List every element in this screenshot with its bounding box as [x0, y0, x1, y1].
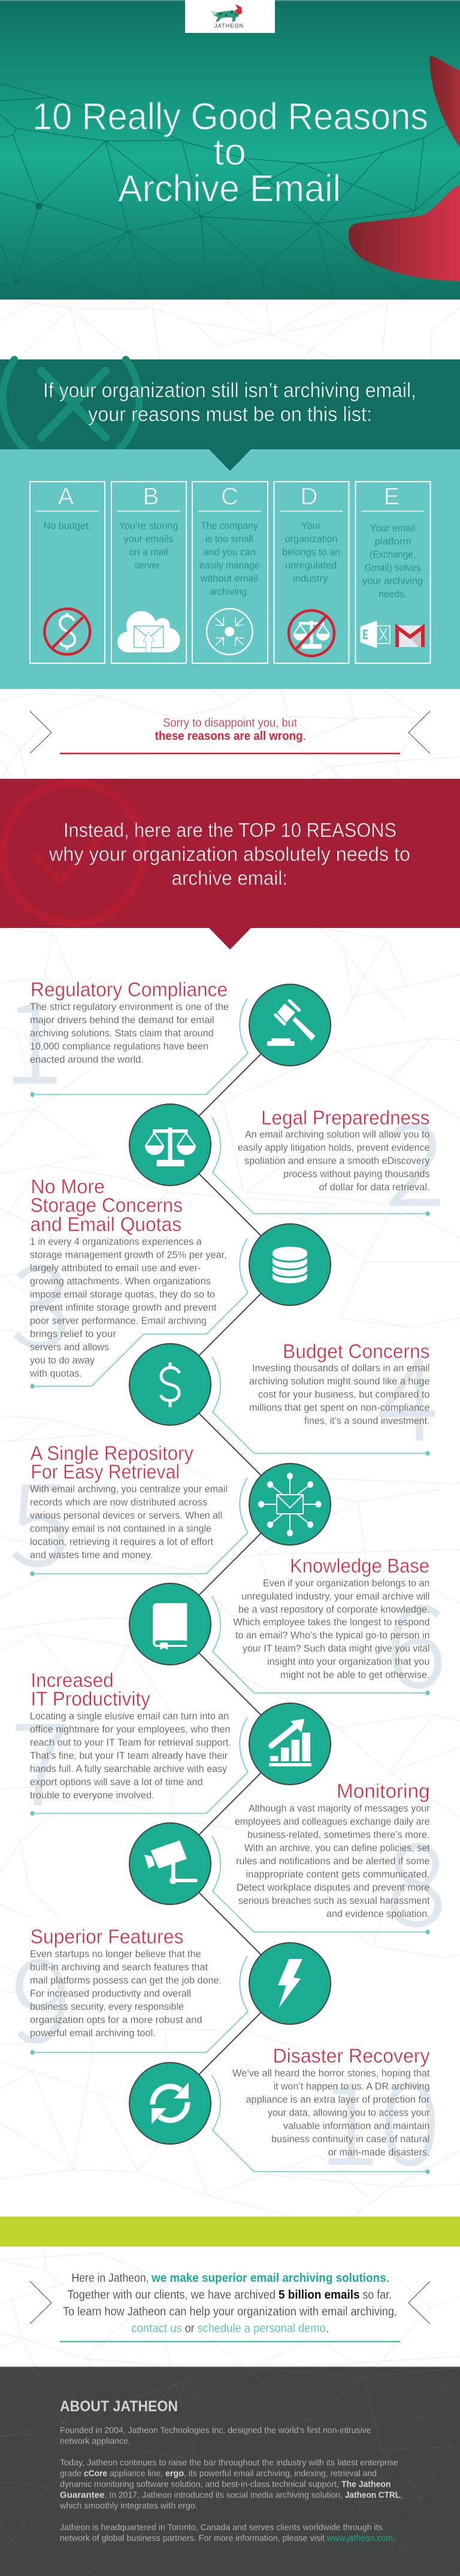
reason 10: it won’t happen to us. A DR archiving [273, 2081, 430, 2092]
callout: reasons are wrong [30, 711, 430, 754]
reason 9 [30, 1925, 331, 2055]
big numeral watermarks: 5 [10, 1434, 71, 1598]
hero network mesh [0, 84, 460, 299]
reason 10: or man-made disasters. [328, 2146, 430, 2158]
reason 9: business security, every responsible [30, 2001, 184, 2012]
reason 10: your data, allowing you to access your [268, 2107, 430, 2118]
reason 10: We’ve all heard the horror stories, hoping that [232, 2067, 430, 2079]
reason 2: of dollar for data retrieval. [319, 1181, 430, 1193]
card C: C [221, 483, 238, 510]
about heading: ABOUT JATHEON [60, 2398, 178, 2415]
about text: grade [60, 2469, 81, 2479]
about text: Founded in 2004, Jatheon Technologies Inc. designed the world’s first non-intrusive [60, 2426, 371, 2436]
reason 9: built-in archiving and search features that [30, 1961, 208, 1973]
reason 5: various personal devices or servers. When all [30, 1510, 222, 1521]
reason 3: No More [31, 1175, 105, 1198]
icon: compress arrows [207, 609, 253, 655]
card E: Gmail) solves [365, 562, 421, 573]
reason 9: Superior Features [30, 1925, 183, 1948]
reason 10: appliance is an extra layer of protection for [246, 2094, 430, 2105]
card E [356, 482, 430, 663]
reason 1: The strict regulatory environment is one of the [30, 1001, 229, 1012]
accent bracket [212, 1836, 428, 1932]
card C: is too small [205, 533, 253, 545]
card E: (Exchange, [370, 549, 416, 560]
about text [59, 2426, 402, 2544]
reason 8: business-related, sometimes there’s more. [247, 1829, 430, 1840]
about text: www.jatheon.com [326, 2533, 393, 2544]
call to action: we make superior email archiving solutions [151, 2272, 386, 2285]
reason 6: your IT team? Such data might give you vital [243, 1643, 430, 1654]
card D: belongs to an [282, 546, 340, 558]
call to action: contact us [131, 2322, 182, 2335]
reason 8: Detect workplace disputes and prevent more [237, 1882, 430, 1893]
about text: , [400, 2490, 402, 2501]
title: to [213, 131, 246, 173]
reason 8: inappropriate content gets communicated. [246, 1868, 430, 1880]
reason 1: archiving solutions. Stats claim that around [30, 1027, 214, 1039]
reason 5: company email is not contained in a single [30, 1523, 211, 1534]
reason 3: brings relief to your [30, 1328, 116, 1340]
call to action: To learn how Jatheon can help your organization with email archiving, [63, 2305, 397, 2318]
icon: growth chart [249, 1703, 331, 1785]
green divider band [0, 2217, 460, 2247]
title: Archive Email [118, 168, 341, 210]
reason 8: rules and notifications and be alerted if some [236, 1855, 430, 1867]
about text: network of global business partners. For more information, please visit [60, 2533, 325, 2544]
reason 7: IT Productivity [31, 1688, 150, 1710]
reason 7: office nightmare for your employees, who then [30, 1724, 230, 1735]
reason 6: Knowledge Base [290, 1555, 429, 1577]
icon: no scales [289, 610, 334, 656]
chevrons [30, 711, 430, 754]
section heading: archive email: [171, 867, 288, 889]
big numeral watermarks: 8 [386, 1794, 447, 1958]
about text: appliance line, [110, 2469, 163, 2479]
reason 10: Disaster Recovery [273, 2045, 430, 2067]
reason 6: might not be able to get otherwise. [280, 1669, 430, 1680]
reason 3: storage management growth of 25% per year, [30, 1249, 227, 1260]
card A: No budget. [43, 520, 91, 531]
call to action: Here in Jatheon, [72, 2272, 149, 2285]
reason 3: poor server performance. Email archiving [30, 1315, 207, 1326]
reason 2 [129, 1104, 430, 1216]
card B: You’re storing [119, 520, 178, 531]
about text: . In 2017, Jatheon introduced its social media archiving solution, [104, 2490, 343, 2501]
logo box [185, 0, 275, 33]
icon: Exchange logo [361, 621, 390, 648]
call to action: or [185, 2322, 195, 2335]
big numeral watermarks: 6 [386, 1555, 447, 1720]
reason 6 [129, 1555, 430, 1695]
reason 7: reach out to your IT Team for retrieval support. [30, 1737, 231, 1748]
reason 8: serious breaches such as sexual harassment [238, 1895, 430, 1906]
reason 8: employees and colleagues exchange daily are [235, 1816, 430, 1827]
icon: book [129, 1583, 211, 1665]
reason 8: Monitoring [337, 1780, 430, 1802]
card B: B [143, 483, 159, 510]
reason 4: fines, it’s a sound investment. [304, 1415, 430, 1426]
mesh nodes [13, 203, 42, 285]
reason 10: valuable information and maintain [283, 2120, 430, 2131]
reason 4: archiving solution might sound like a huge [249, 1375, 430, 1387]
reason 3 [29, 1175, 331, 1389]
icon: refresh [129, 2063, 211, 2144]
reason 4 [129, 1340, 430, 1456]
reason 10 [129, 2045, 430, 2174]
icon: Gmail logo [395, 625, 425, 647]
section heading [49, 819, 410, 889]
big numeral watermarks: 4 [377, 1308, 438, 1473]
section heading: your reasons must be on this list: [88, 403, 372, 426]
reason 2: Legal Preparedness [261, 1106, 430, 1129]
reason 9: For increased productivity and overall [30, 1988, 191, 1999]
accent bracket [32, 999, 248, 1095]
reason 3: impose email storage quotas, they do so to [30, 1289, 215, 1300]
icon: fox [211, 4, 242, 22]
panel: top 10 header band [0, 779, 460, 950]
card A: A [58, 483, 74, 510]
icon: scales [129, 1104, 211, 1186]
big numeral watermarks: 10 [319, 2033, 440, 2197]
card D [274, 482, 349, 663]
reason 5: A Single Repository [30, 1442, 193, 1464]
reason 7: hands full. A fully searchable archive with easy [30, 1763, 227, 1774]
reason 9: organization opts for a more robust and [30, 2014, 202, 2025]
section heading: If your organization still isn’t archiving email, [43, 379, 416, 402]
call to action: so far. [362, 2288, 392, 2302]
accent bracket [212, 1597, 428, 1693]
accent bracket [32, 1478, 248, 1574]
reason 1: major drivers behind the demand for email [30, 1014, 214, 1026]
reason 1: Regulatory Compliance [31, 978, 228, 1000]
card D: unregulated [285, 560, 337, 571]
reason 4: cost for your business, but compared to [258, 1389, 430, 1400]
reason 3: servers and allows [30, 1341, 109, 1353]
about text: cCore [84, 2469, 107, 2479]
section heading: Instead, here are the TOP 10 REASONS [63, 819, 397, 841]
reason 9: mail platforms possess can get the job done. [30, 1975, 222, 1986]
reason 5 [30, 1442, 331, 1576]
reason 8: Although a vast majority of messages your [249, 1803, 430, 1814]
reason 6: to an email? Who’s the typical go-to person in [235, 1629, 430, 1641]
accent bracket [212, 1357, 428, 1453]
reason 5: records which are now distributed across [30, 1496, 207, 1508]
reason 7 [30, 1669, 331, 1816]
card D: Your [302, 520, 321, 531]
big numeral watermarks: 3 [11, 1215, 72, 1380]
icon: cloud email upload [117, 611, 180, 652]
card E: needs. [379, 588, 407, 600]
reason 4: Investing thousands of dollars in an email [252, 1362, 430, 1374]
about text: network appliance. [60, 2436, 131, 2447]
reason 10: business continuity in case of natural [271, 2133, 430, 2145]
watermark: check in circle [3, 783, 143, 923]
call to action [30, 2272, 430, 2342]
reason 2: easily apply litigation holds, prevent evidence [238, 1142, 430, 1153]
reason 2: An email archiving solution will allow you to [245, 1129, 430, 1140]
accent bracket [32, 1956, 248, 2052]
reason 6: insight into your organization that you [267, 1656, 430, 1667]
reason 3: with quotas. [29, 1368, 82, 1379]
about text: Jatheon CTRL [345, 2490, 400, 2501]
about text: dynamic monitoring software solution, and best-in-class technical support, [60, 2480, 339, 2490]
card E: your archiving [362, 575, 423, 586]
icon: no dollar [44, 609, 90, 654]
card E: platform [375, 536, 411, 547]
card B: server. [134, 560, 162, 571]
reason 7: export options will save a lot of time and [30, 1776, 202, 1788]
big numeral watermarks: 2 [385, 1074, 446, 1238]
reason 7: Increased [31, 1669, 114, 1691]
card D: organization [285, 533, 338, 545]
logo wordmark: JATHEON [214, 23, 243, 29]
call to action: Together with our clients, we have archived [68, 2288, 276, 2302]
reason 6: Even if your organization belongs to an [263, 1577, 430, 1589]
reason 1: 10,000 compliance regulations have been [30, 1041, 208, 1052]
title: 10 Really Good Reasons [32, 96, 428, 138]
reason 6: Which employee takes the longest to respond [233, 1616, 429, 1628]
about text: Jatheon is headquartered in Toronto, Canada and serves clients worldwide through its [60, 2522, 383, 2533]
icon: dollar [129, 1344, 211, 1425]
callout: reasons are wrong: these reasons are all wrong [155, 730, 303, 743]
reason 2: process without paying thousands [283, 1168, 430, 1180]
title [32, 96, 428, 210]
card D: D [301, 483, 317, 510]
about text: . [394, 2533, 396, 2544]
card B [111, 482, 186, 663]
reason 5: location, retrieving it requires a lot of effort [30, 1536, 213, 1547]
reason 7: trouble to everyone involved. [30, 1789, 155, 1801]
card B: your emails [124, 533, 173, 545]
reason 9: Even startups no longer believe that the [30, 1948, 201, 1960]
section heading: why your organization absolutely needs to [49, 843, 410, 865]
big numeral watermarks: 9 [11, 1910, 72, 2075]
reason 3: Storage Concerns [30, 1194, 183, 1216]
card C: archiving. [210, 586, 249, 597]
call to action: . [326, 2322, 329, 2335]
reason 1 [30, 978, 331, 1097]
reason 6: unregulated industry, your email archive will [241, 1591, 430, 1602]
card C: and you can [204, 546, 256, 558]
card C: The company [201, 520, 258, 531]
icon: security camera [129, 1823, 211, 1904]
big numeral watermarks: 1 [3, 951, 64, 1116]
reason 4: millions that get spent on non-compliance [249, 1402, 430, 1413]
reason 8: With an archive, you can define policies, set [244, 1842, 430, 1854]
connector timeline [170, 1025, 290, 2103]
card E: Your email [370, 522, 415, 534]
watermark: X in circle [3, 359, 139, 449]
about text: The Jatheon [341, 2480, 391, 2490]
reason 3: 1 in every 4 organizations experiences a [30, 1236, 202, 1247]
call to action: . [386, 2272, 390, 2285]
reason 8: and evidence spoliation. [326, 1908, 430, 1919]
callout: reasons are wrong: . [303, 730, 306, 743]
panel: objections [0, 449, 460, 689]
icon: email network [249, 1464, 331, 1545]
card C [192, 482, 268, 663]
reason 7: That’s fine, but your IT team already have their [30, 1750, 228, 1761]
accent bracket [32, 1718, 248, 1813]
card E: E [384, 483, 400, 510]
reason 3: growing attachments. When organizations [30, 1275, 211, 1287]
icon: gavel [249, 984, 331, 1066]
footer mesh [0, 2367, 460, 2576]
big numeral watermarks [3, 951, 447, 2197]
reason 7: Locating a single elusive email can turn into an [30, 1710, 229, 1722]
reason 9: powerful email archiving tool. [30, 2027, 156, 2039]
about text: Guarantee [60, 2490, 104, 2501]
big numeral watermarks: 7 [11, 1673, 72, 1838]
about text: Today, Jatheon continues to raise the bar throughout the industry with its latest enterprise [60, 2458, 398, 2468]
about text: , its powerful email archiving, indexing, retrieval and [184, 2469, 377, 2479]
about text: ergo [165, 2469, 184, 2479]
card B: on a mail [129, 546, 168, 558]
reason 3: you to do away [30, 1354, 95, 1366]
red fox tail shapes [349, 56, 460, 281]
card D: industry. [293, 573, 330, 584]
reason 6: be a vast repository of corporate knowledge. [238, 1604, 430, 1615]
reason 5: With email archiving, you centralize your email [30, 1483, 228, 1495]
reason 1: enacted around the world. [30, 1054, 144, 1065]
section heading [43, 379, 416, 426]
callout: reasons are wrong: Sorry to disappoint you, but [163, 716, 297, 730]
reason 4: Budget Concerns [283, 1340, 430, 1362]
accent bracket [212, 1117, 428, 1214]
reason 3: prevent infinite storage growth and prevent [30, 1302, 217, 1313]
accent bracket [32, 1238, 248, 1386]
reason 3: largely attributed to email use and ever- [30, 1262, 201, 1274]
icon: database [249, 1224, 331, 1305]
reason 2: spoliation and ensure a smooth eDiscovery [244, 1155, 430, 1166]
chevrons [30, 2281, 430, 2324]
accent bracket [212, 2075, 428, 2172]
reason 8 [129, 1780, 430, 1934]
call to action: 5 billion emails [279, 2288, 359, 2302]
card C: easily manage [199, 560, 259, 571]
reason 5: For Easy Retrieval [31, 1461, 180, 1483]
icon: lightning bolt [249, 1943, 331, 2024]
hero banner [0, 0, 460, 300]
card C: without email [200, 573, 258, 584]
call to action: schedule a personal demo [198, 2322, 326, 2335]
about text: which smoothly integrates with ergo. [59, 2501, 198, 2511]
panel: objections header band [0, 359, 460, 449]
reason 5: and wastes time and money. [30, 1549, 153, 1561]
reason 3: and Email Quotas [30, 1213, 181, 1235]
card A [30, 482, 105, 663]
footer: about [0, 2366, 460, 2576]
